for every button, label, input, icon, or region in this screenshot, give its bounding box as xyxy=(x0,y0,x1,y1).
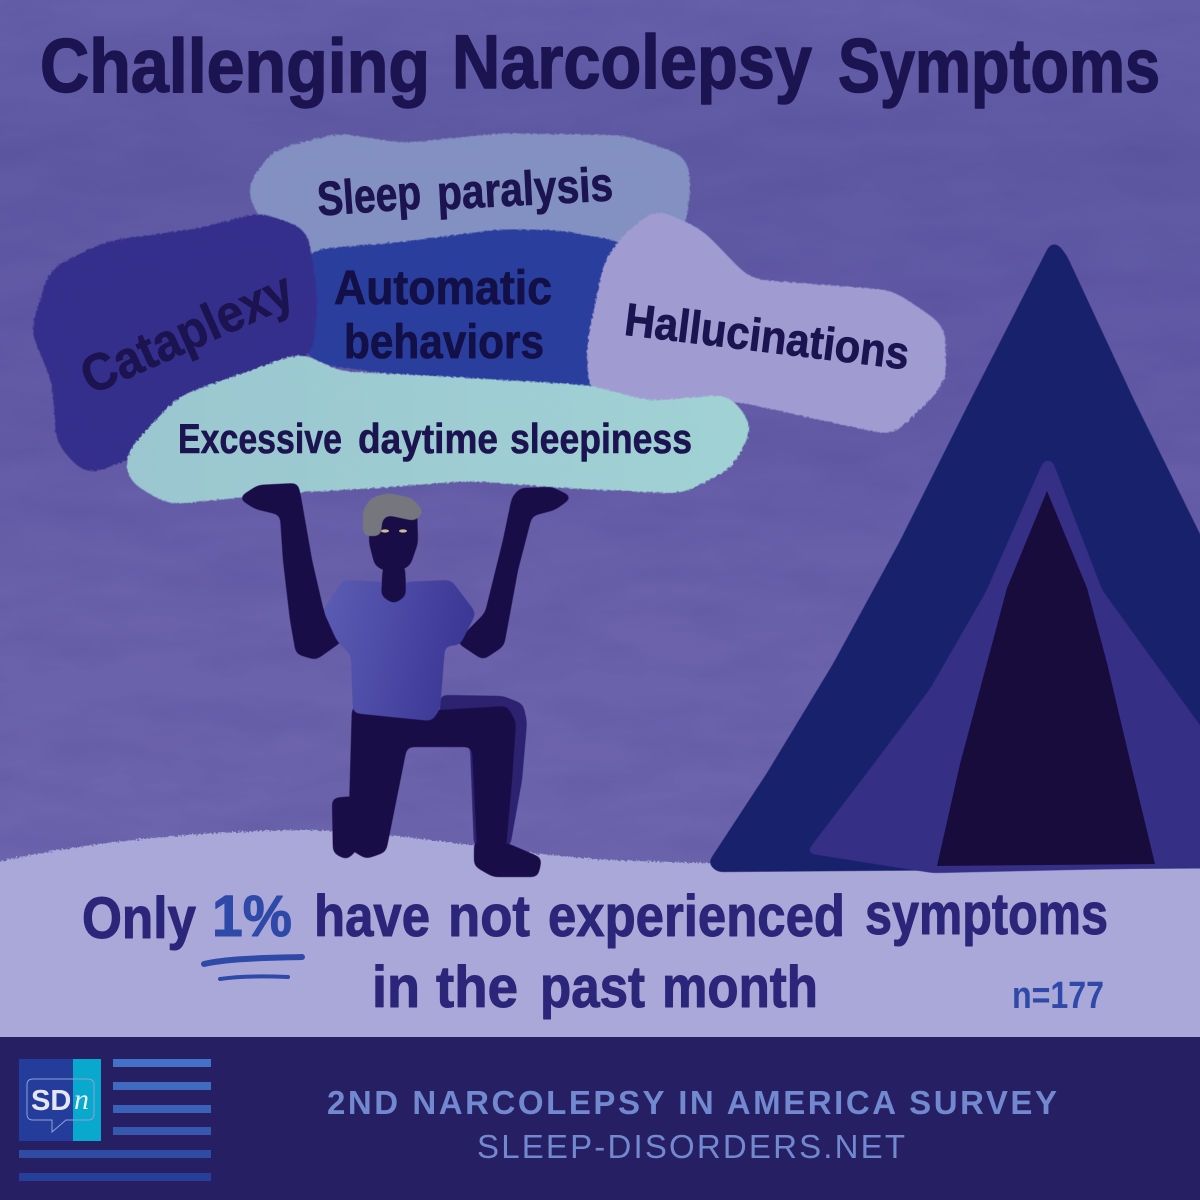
front foot xyxy=(474,841,542,877)
tent xyxy=(708,244,1200,873)
title xyxy=(40,20,1160,109)
logo: flag xyxy=(19,1059,211,1181)
label: sleep paralysis: paralysis xyxy=(436,158,614,221)
label: excessive daytime sleepiness: Excessive xyxy=(178,415,342,462)
caption: line two xyxy=(372,955,818,1020)
caption: line two: the xyxy=(436,955,518,1020)
caption: rest of line one: experienced xyxy=(548,884,845,949)
caption: rest of line one xyxy=(314,882,1108,949)
caption: line two: month xyxy=(662,955,818,1020)
caption: only: Only xyxy=(82,886,196,951)
caption: rest of line one: not xyxy=(448,884,530,949)
logo: SD: SD xyxy=(31,1085,71,1117)
label: excessive daytime sleepiness: daytime xyxy=(358,415,498,462)
footer url: SLEEP-DISORDERS.NET xyxy=(477,1128,905,1165)
logo: n: n xyxy=(74,1083,89,1116)
rear leg shade xyxy=(440,695,527,847)
bubble: automatic behaviors xyxy=(300,229,640,388)
snow ground xyxy=(0,830,1200,1060)
caption: line two: in xyxy=(372,955,420,1020)
legs xyxy=(348,706,516,859)
caption: rest of line one: have xyxy=(314,884,430,949)
label: excessive daytime sleepiness xyxy=(178,415,692,462)
underline for 1% xyxy=(204,957,302,979)
shirt xyxy=(323,580,476,721)
neck xyxy=(381,565,406,604)
label: sleep paralysis xyxy=(315,158,614,227)
label: excessive daytime sleepiness: sleepiness xyxy=(510,415,692,462)
eyes xyxy=(381,529,407,533)
label: automatic: Automatic xyxy=(334,262,552,315)
footer heading: 2ND NARCOLEPSY IN AMERICA SURVEY xyxy=(327,1084,1057,1121)
tent inner flap xyxy=(806,460,1200,873)
label: hallucinations: Hallucinations xyxy=(622,293,912,379)
bubble: sleep paralysis xyxy=(246,133,691,267)
bubble labels xyxy=(72,158,912,462)
caption xyxy=(82,882,1108,1020)
title: Narcolepsy xyxy=(452,20,812,105)
tent outer body xyxy=(708,244,1200,872)
bubble: excessive daytime sleepiness xyxy=(126,352,754,505)
bubbles xyxy=(30,133,946,505)
neck front xyxy=(381,572,406,604)
footer band xyxy=(0,1037,1200,1200)
logo: speech bubble xyxy=(27,1079,94,1132)
left arm xyxy=(238,483,344,660)
hair xyxy=(363,493,424,536)
title: Challenging xyxy=(40,24,430,109)
label: sleep paralysis: Sleep xyxy=(315,166,423,227)
caption: 1%: 1% xyxy=(212,884,292,949)
person xyxy=(238,483,573,877)
bubble: hallucinations xyxy=(586,208,946,436)
caption: line two: past xyxy=(540,955,645,1020)
label: behaviors: behaviors xyxy=(344,316,544,369)
sample size note: n=177 xyxy=(1012,975,1104,1017)
caption: rest of line one: symptoms xyxy=(865,882,1108,947)
label: cataplexy: Cataplexy xyxy=(72,261,302,406)
back foot xyxy=(332,796,358,860)
tent opening xyxy=(937,491,1155,866)
bubble: cataplexy xyxy=(30,212,318,476)
head xyxy=(369,508,418,574)
right arm xyxy=(456,487,573,660)
